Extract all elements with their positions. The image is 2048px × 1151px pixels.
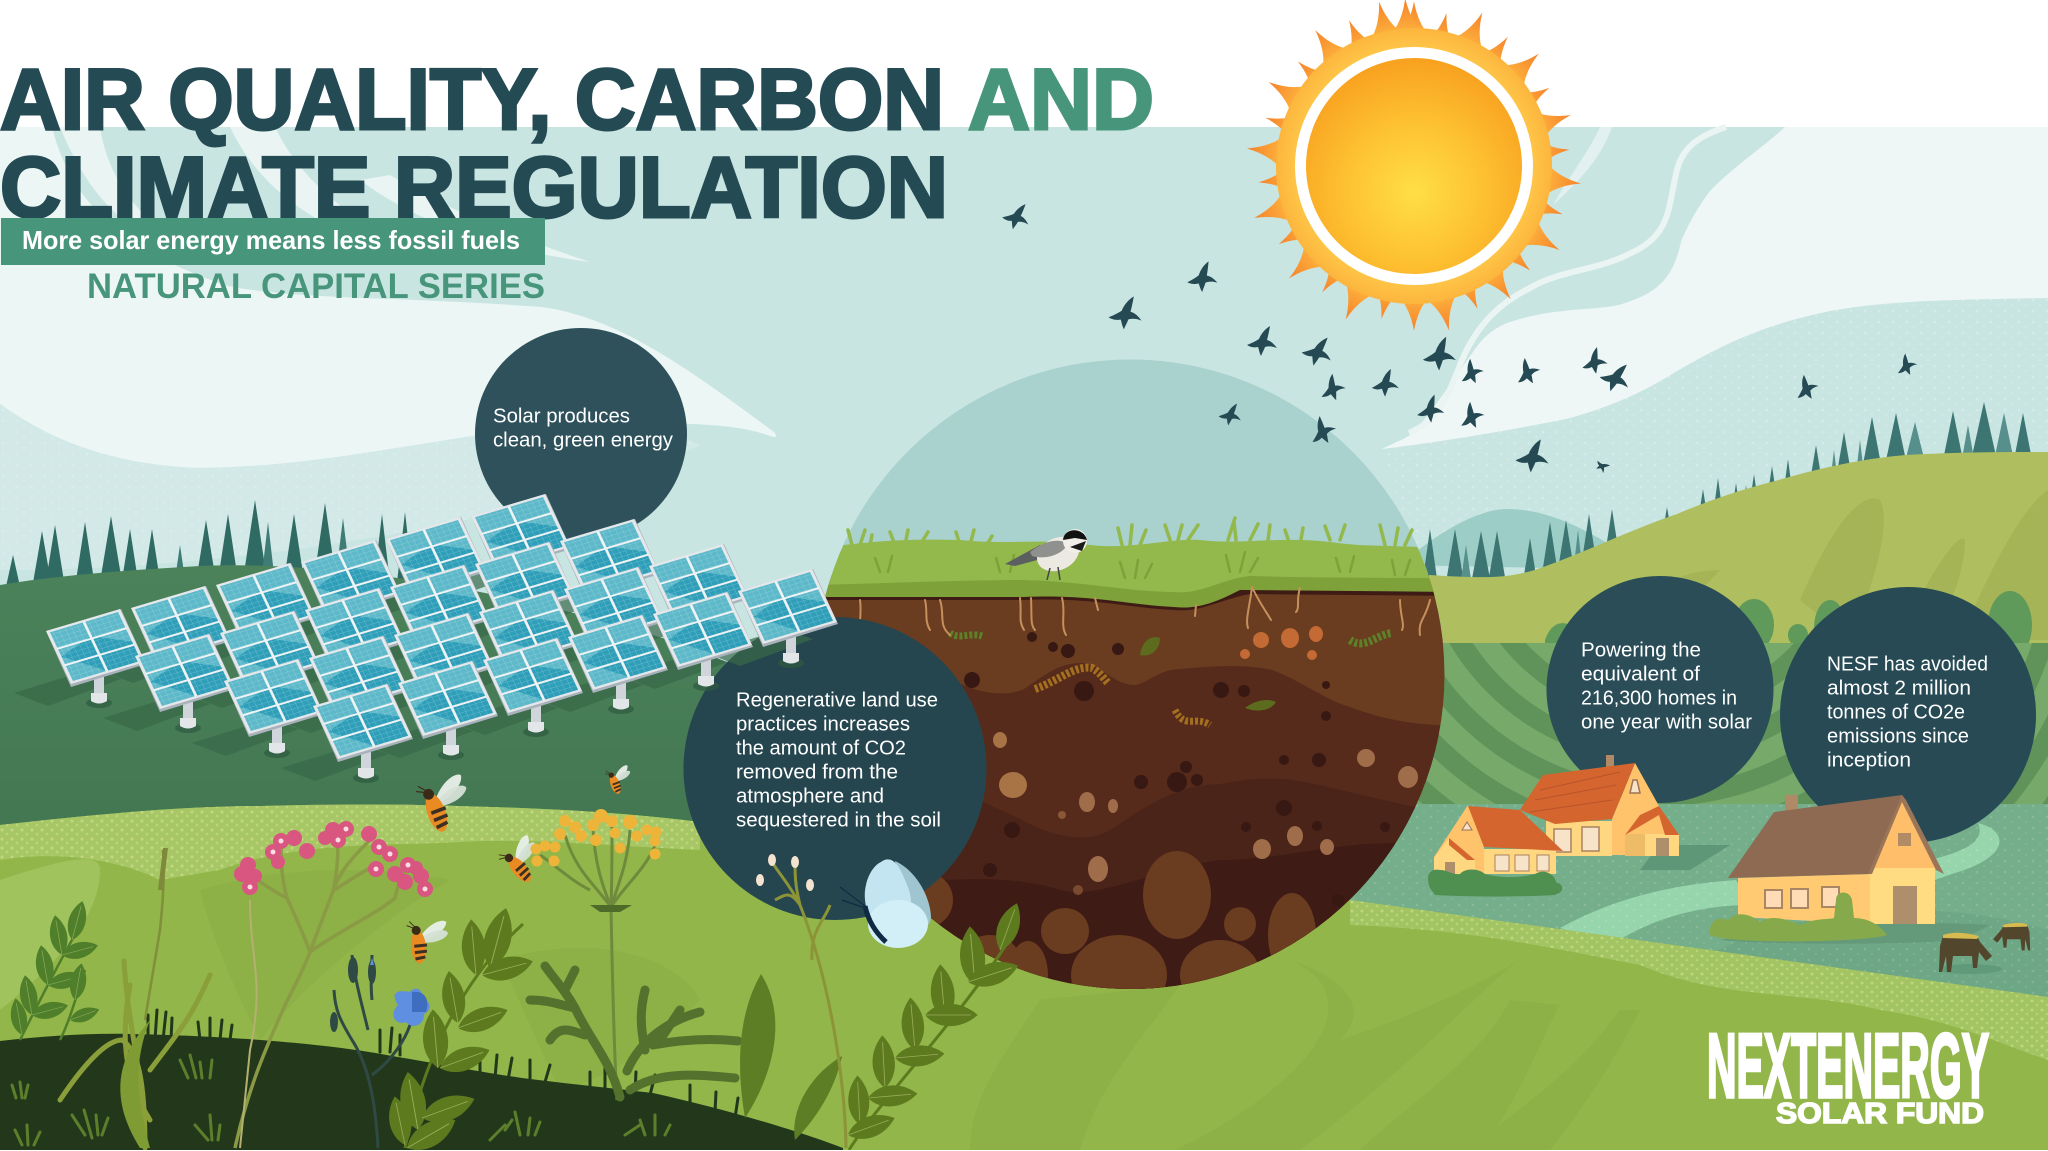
plant: blue flower xyxy=(330,955,430,1148)
meadow streaks xyxy=(970,960,1640,1150)
soil layer 2 xyxy=(932,663,1440,989)
solar panel array xyxy=(14,494,838,783)
dark foreground hill xyxy=(0,1034,843,1150)
cows xyxy=(1938,923,2030,974)
grass band xyxy=(826,540,1432,593)
meadow foreground xyxy=(0,804,2048,1150)
worms and beetles xyxy=(950,633,1392,725)
callout: powering homes: 216,300 homes in xyxy=(1581,688,1737,710)
distant bushes xyxy=(1545,591,2032,659)
title: AIR QUALITY, CARBON xyxy=(0,52,944,148)
callout: powering homes: Powering the xyxy=(1581,640,1701,662)
soil cross-section xyxy=(825,540,1444,989)
roots xyxy=(860,587,1430,635)
plant: left fern xyxy=(8,899,101,1040)
callout: solar produces clean energy: clean, green energy xyxy=(493,430,673,452)
meadow light patch xyxy=(0,859,100,1010)
cloud: left swoosh xyxy=(0,127,776,468)
house: main cottage xyxy=(1720,795,1990,944)
callout: regenerative land use: practices increases xyxy=(736,714,910,736)
callout: regenerative land use: removed from the xyxy=(736,762,898,784)
callout: solar produces clean energy: Solar produces xyxy=(493,406,630,428)
bush: green hedge xyxy=(1428,870,1562,896)
meadow dotted edge xyxy=(0,804,700,880)
plant: seaweed fern xyxy=(530,966,738,1097)
callout: regenerative land use: sequestered in the soil xyxy=(736,810,941,832)
callout: regenerative land use: Regenerative land use xyxy=(736,690,938,712)
callout: avoided emissions: emissions since xyxy=(1827,726,1969,748)
distant mountain xyxy=(1400,509,1650,570)
title: CLIMATE REGULATION xyxy=(0,140,948,236)
trees: left row xyxy=(3,500,415,600)
cloud: mid haze xyxy=(0,404,700,570)
callout: avoided emissions: NESF has avoided xyxy=(1827,654,1988,676)
logo: SOLAR FUND xyxy=(1776,1098,1984,1130)
title: AND xyxy=(968,52,1154,148)
callout: powering homes: one year with solar xyxy=(1581,712,1752,734)
right hill xyxy=(1420,452,2048,700)
callout: powering homes xyxy=(1546,576,1774,803)
callout: regenerative land use: the amount of CO2 xyxy=(736,738,906,760)
stones xyxy=(924,851,1316,989)
subtitle banner: More solar energy means less fossil fuels xyxy=(22,225,520,255)
flower: yellow xyxy=(530,809,662,1100)
dark holes xyxy=(964,632,1390,877)
grass inner tufts xyxy=(875,552,1410,578)
bush: olive hedge xyxy=(1710,892,1887,941)
soil layer 3 xyxy=(932,778,1415,989)
callout: powering homes: equivalent of xyxy=(1581,664,1700,686)
subtitle banner xyxy=(1,218,545,265)
hill shading xyxy=(1600,490,2048,640)
callout: regenerative land use: atmosphere and xyxy=(736,786,884,808)
dark hill grass tufts xyxy=(12,1010,738,1145)
cloud: thin ribbon xyxy=(1409,127,1726,433)
sky stipple right xyxy=(1382,298,2048,570)
dark line under grass xyxy=(800,585,1460,610)
soil layer 1 xyxy=(800,575,1460,1005)
cloud: right swoosh xyxy=(1382,127,2048,449)
plant: white budded flower xyxy=(756,854,846,1148)
bottom edge xyxy=(0,1150,2048,1151)
callout: avoided emissions xyxy=(1780,587,2036,843)
cloud: streaks xyxy=(60,127,590,262)
callout: avoided emissions: almost 2 million xyxy=(1827,678,1971,700)
houses: orange pair xyxy=(1434,755,1730,876)
striped fields xyxy=(1416,643,2048,804)
cloud: by the sun xyxy=(1553,127,1612,205)
sun xyxy=(1245,0,1583,333)
forest hill with solar farm ground xyxy=(0,565,850,840)
orange nodules xyxy=(1240,626,1323,660)
soil layer 4 xyxy=(931,843,1396,989)
flock of birds xyxy=(1001,200,1920,475)
callout: avoided emissions: inception xyxy=(1827,750,1911,772)
dome above soil xyxy=(816,360,1444,674)
title xyxy=(0,52,1154,236)
series label: NATURAL CAPITAL SERIES xyxy=(87,267,545,306)
bird: chickadee xyxy=(1005,529,1087,580)
callout: regenerative land use xyxy=(684,617,986,920)
plants: olive sprigs xyxy=(384,900,1027,1151)
teal meadow with path xyxy=(1300,804,2048,1004)
pebbles xyxy=(993,732,1418,895)
plant: tall blades xyxy=(60,848,842,1148)
trees: right row xyxy=(1420,402,2033,600)
grass tufts xyxy=(848,518,1412,548)
butterfly xyxy=(840,859,931,948)
flower: pink xyxy=(234,821,433,1148)
callout: solar produces clean energy xyxy=(475,328,687,540)
bees xyxy=(397,765,630,971)
callout: avoided emissions: tonnes of CO2e xyxy=(1827,702,1965,724)
